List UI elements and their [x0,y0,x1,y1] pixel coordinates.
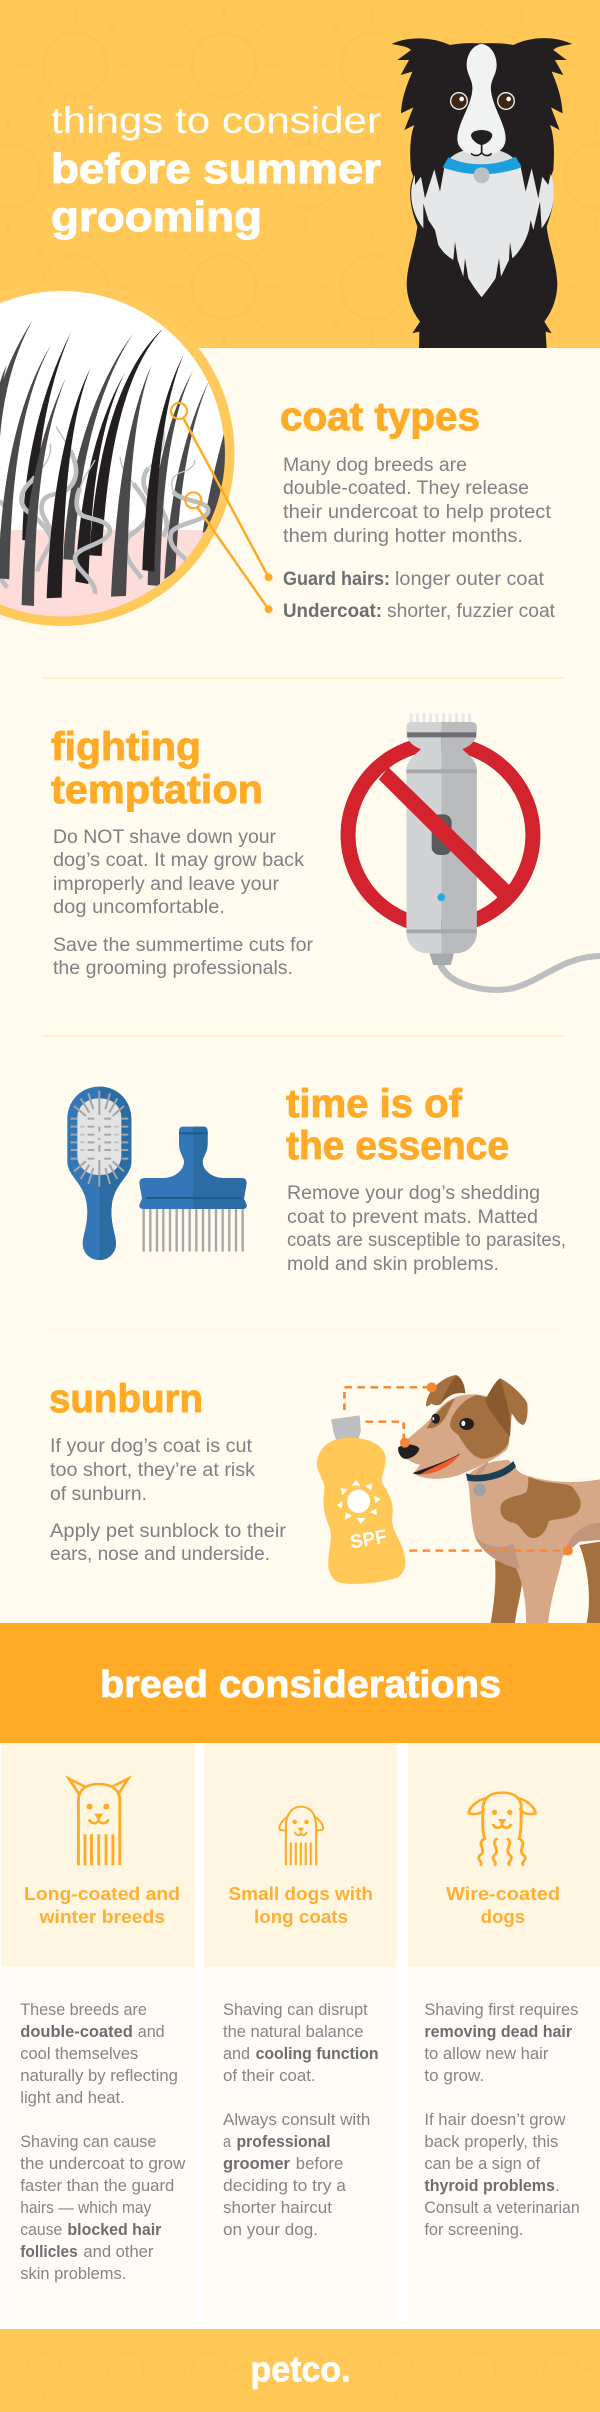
heading: small dogs with long coats [228,1884,373,1927]
text: wire-coated body: to allow new hair [424,2045,549,2063]
panel: sunburn [49,1375,600,1623]
text: coat types intro: double-coated. They release [283,478,529,499]
panel: time is of the essence [67,1082,566,1275]
panel: cream content background [0,348,600,1624]
text: fighting temptation body [53,827,314,979]
label: undercoat [283,601,556,622]
text: small dogs body: shorter haircut [223,2199,332,2217]
heading: wire-coated dogs [446,1884,560,1927]
text: long-coated body: cause [20,2221,62,2239]
text: wire-coated body: to grow. [424,2067,484,2085]
title: things to consider [51,100,381,141]
text: sunburn body: Apply pet sunblock to their [50,1521,287,1542]
heading: fighting temptation: temptation [51,768,263,812]
label: undercoat: Undercoat: [283,601,382,622]
heading: small dogs with long coats: long coats [254,1907,348,1927]
illustration: brown and tan dog [398,1375,600,1623]
icon: small long-coated dog [279,1807,323,1865]
text: small dogs body: a [223,2133,232,2151]
heading: fighting temptation [51,725,263,812]
text: long-coated body: faster than the guard [20,2177,174,2195]
text: wire-coated body: thyroid problems [424,2177,555,2195]
text: sunburn body [50,1436,287,1565]
label: guard hairs: longer outer coat [395,569,545,590]
heading: long-coated and winter breeds: winter breeds [38,1907,165,1927]
text: long-coated body: and [138,2023,165,2041]
panel: wire-coated dogs card [408,1743,600,2320]
text: long-coated body: skin problems. [20,2265,126,2283]
illustration: clipper with prohibition sign [341,713,600,990]
text: small dogs body: Shaving can disrupt [223,2001,368,2019]
label: guard hairs [283,569,545,590]
heading: long-coated and winter breeds [24,1884,180,1927]
illustration: sunscreen bottle: SPF [348,1526,389,1553]
text: wire-coated body: If hair doesn’t grow [424,2111,565,2129]
text: sunburn body: of sunburn. [50,1484,147,1505]
title: before summer [51,145,381,192]
heading: coat types: coat types [280,395,480,439]
text: wire-coated body: Shaving first requires [424,2001,578,2019]
text: small dogs body: Always consult with [223,2111,370,2129]
heading: time is of the essence: the essence [286,1124,509,1168]
callout lines to labels [171,403,273,613]
text: small dogs body: deciding to try a [223,2177,347,2195]
text: wire-coated body: Consult a veterinarian [424,2199,580,2217]
text: small dogs body: and [223,2045,250,2063]
text: time is of the essence body: coats are susceptible to parasites, [287,1230,566,1251]
text: wire-coated body: removing dead hair [424,2023,573,2041]
text: small dogs body: on your dog. [223,2221,318,2239]
text: wire-coated body: back properly, this [424,2133,558,2151]
text: long-coated body: Shaving can cause [20,2133,156,2151]
panel: header [0,0,600,349]
title: grooming [51,193,262,240]
text: long-coated body: hairs — which may [20,2199,152,2217]
text: wire-coated body: can be a sign of [424,2155,540,2173]
text: long-coated body: double-coated [20,2023,133,2041]
text: long-coated body: light and heat. [20,2089,125,2107]
heading: wire-coated dogs: dogs [481,1907,525,1927]
panel: small dogs with long coats card [204,1743,397,2320]
text: long-coated body: blocked hair [67,2221,162,2239]
text: fighting temptation body: Do NOT shave down your [53,827,277,848]
illustration: border collie [392,38,572,349]
panel: long-coated and winter breeds card [1,1743,195,2320]
heading: time is of the essence: time is of [286,1082,463,1126]
text: fighting temptation body: dog uncomfortable. [53,897,225,918]
panel: coat types [0,286,556,630]
text: sunburn body: If your dog’s coat is cut [50,1436,253,1457]
label: undercoat: shorter, fuzzier coat [387,601,556,622]
heading: breed considerations: breed considerations [100,1664,501,1706]
heading: long-coated and winter breeds: Long-coated and [24,1884,180,1904]
text: small dogs body: professional [236,2133,330,2151]
text: small dogs body: the natural balance [223,2023,364,2041]
label: guard hairs: Guard hairs: [283,569,390,590]
panel: footer [0,2329,600,2412]
text: small dogs body [223,2001,379,2239]
logo: petco: petco. [250,2348,350,2390]
text: coat types intro: their undercoat to help protect [283,502,552,523]
text: long-coated body: cool themselves [20,2045,138,2063]
text: coat types intro [283,455,552,547]
panel: fighting temptation [51,713,600,990]
heading: sunburn: sunburn [49,1377,203,1421]
text: long-coated body: and other [83,2243,154,2261]
title [51,100,381,240]
text: long-coated body: These breeds are [20,2001,147,2019]
text: long-coated body: follicles [20,2243,78,2261]
icon: wire-coated dog [469,1793,535,1866]
text: time is of the essence body: Remove your dog’s shedding [287,1183,540,1204]
text: time is of the essence body: mold and skin problems. [287,1254,499,1275]
icon: long-coated dog [69,1779,128,1865]
icon: brush and comb [67,1087,247,1260]
heading: wire-coated dogs: Wire-coated [446,1884,560,1904]
text: long-coated body: naturally by reflecting [20,2067,178,2085]
panel: breed considerations banner [0,1623,600,1743]
text: fighting temptation body: improperly and leave your [53,874,280,895]
text: small dogs body: groomer [223,2155,291,2173]
illustration: sunscreen bottle [317,1415,405,1584]
text: time is of the essence body [287,1183,566,1275]
heading: time is of the essence [286,1082,509,1168]
illustration: hair magnifier [0,284,234,626]
heading: small dogs with long coats: Small dogs with [228,1884,373,1904]
text: wire-coated body: . [555,2177,560,2195]
text: wire-coated body: for screening. [424,2221,523,2239]
text: fighting temptation body: the grooming professionals. [53,958,293,979]
text: small dogs body: cooling function [256,2045,379,2063]
text: sunburn body: ears, nose and underside. [50,1544,270,1565]
text: wire-coated body [424,2001,580,2239]
text: coat types intro: Many dog breeds are [283,455,467,476]
text: coat types intro: them during hotter months. [283,526,523,547]
text: fighting temptation body: Save the summertime cuts for [53,935,314,956]
text: small dogs body: before [296,2155,343,2173]
text: long-coated body [20,2001,185,2283]
heading: fighting temptation: fighting [51,725,201,769]
text: long-coated body: the undercoat to grow [20,2155,185,2173]
text: sunburn body: too short, they’re at risk [50,1460,256,1481]
text: fighting temptation body: dog’s coat. It may grow back [53,850,305,871]
callout: dashed application points [344,1382,573,1556]
text: small dogs body: of their coat. [223,2067,316,2085]
text: time is of the essence body: coat to prevent mats. Matted [287,1207,538,1228]
